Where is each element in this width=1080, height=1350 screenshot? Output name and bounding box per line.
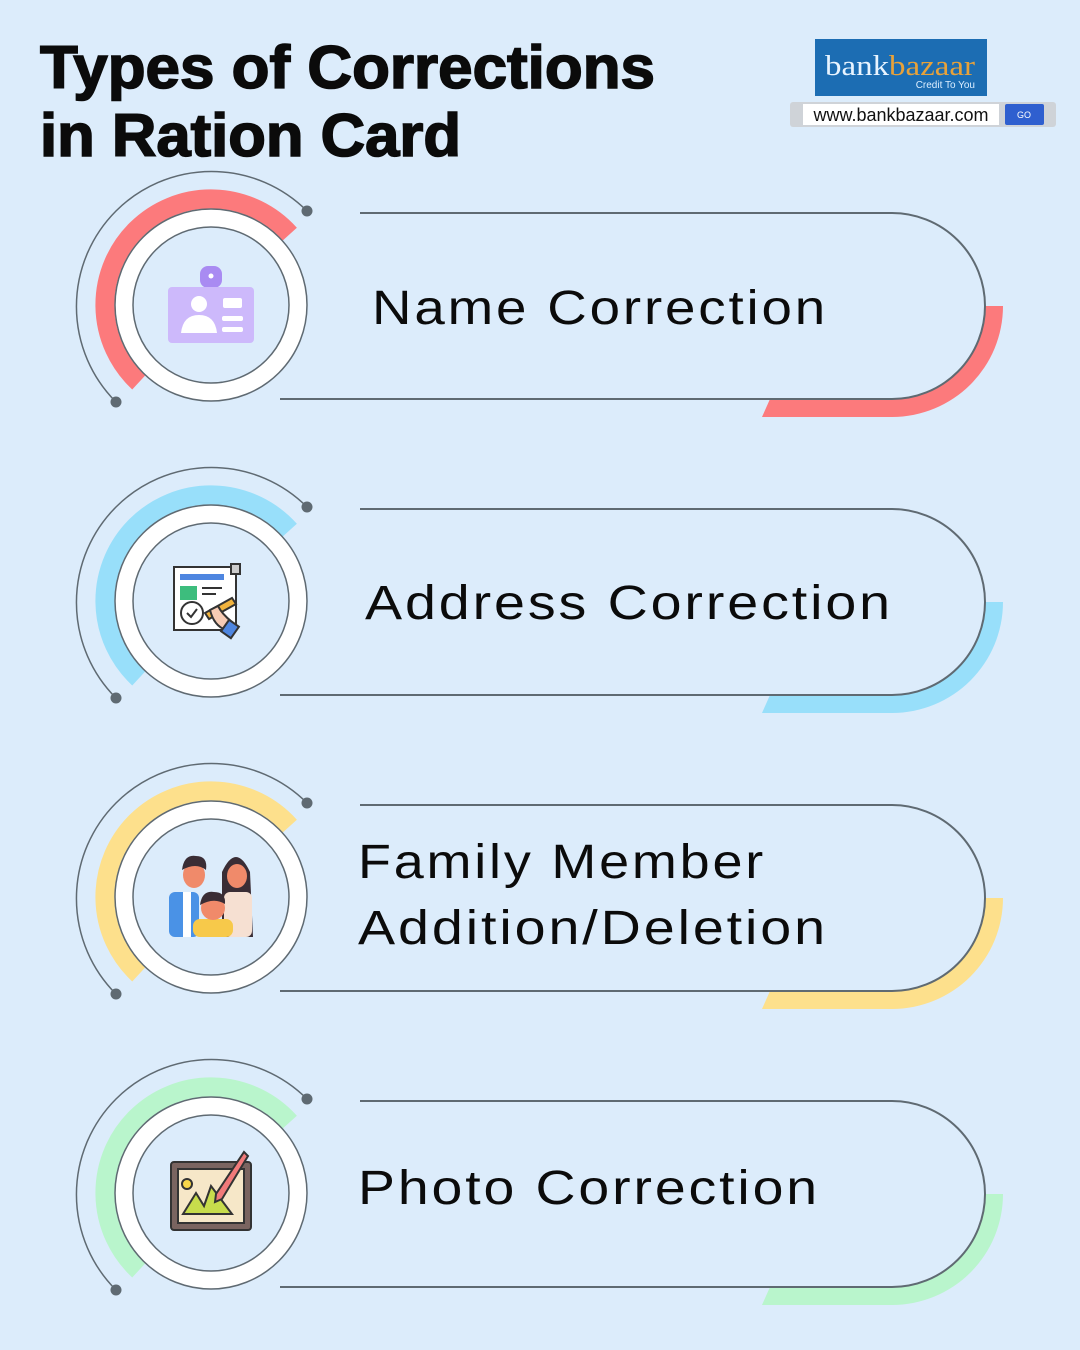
icon: id card xyxy=(168,266,254,343)
label: Photo Correction xyxy=(358,1162,820,1215)
title xyxy=(40,34,655,169)
label: Address Correction xyxy=(365,577,893,630)
icon: family xyxy=(169,856,253,937)
logo: bankbazaar: GO xyxy=(1017,110,1031,120)
icon: form with pencil xyxy=(174,564,240,638)
logo: bankbazaar: bank bazaar xyxy=(825,50,975,82)
label xyxy=(358,836,828,955)
icon: picture with pencil xyxy=(171,1152,251,1230)
label: Addition/Deletion xyxy=(358,902,828,955)
logo: bankbazaar: Credit To You xyxy=(916,80,975,91)
item 3: Family Member Addition/Deletion xyxy=(76,763,1003,1009)
item 4: Photo Correction xyxy=(76,1059,1003,1305)
label: Family Member xyxy=(358,836,766,889)
item 2: Address Correction xyxy=(76,467,1003,713)
title: Types of Corrections xyxy=(40,34,655,101)
label: Name Correction xyxy=(372,282,828,335)
item 1: Name Correction xyxy=(76,171,1003,417)
logo: bankbazaar xyxy=(790,39,1056,127)
title: in Ration Card xyxy=(40,102,461,169)
logo: bankbazaar: www.bankbazaar.com xyxy=(812,105,989,125)
